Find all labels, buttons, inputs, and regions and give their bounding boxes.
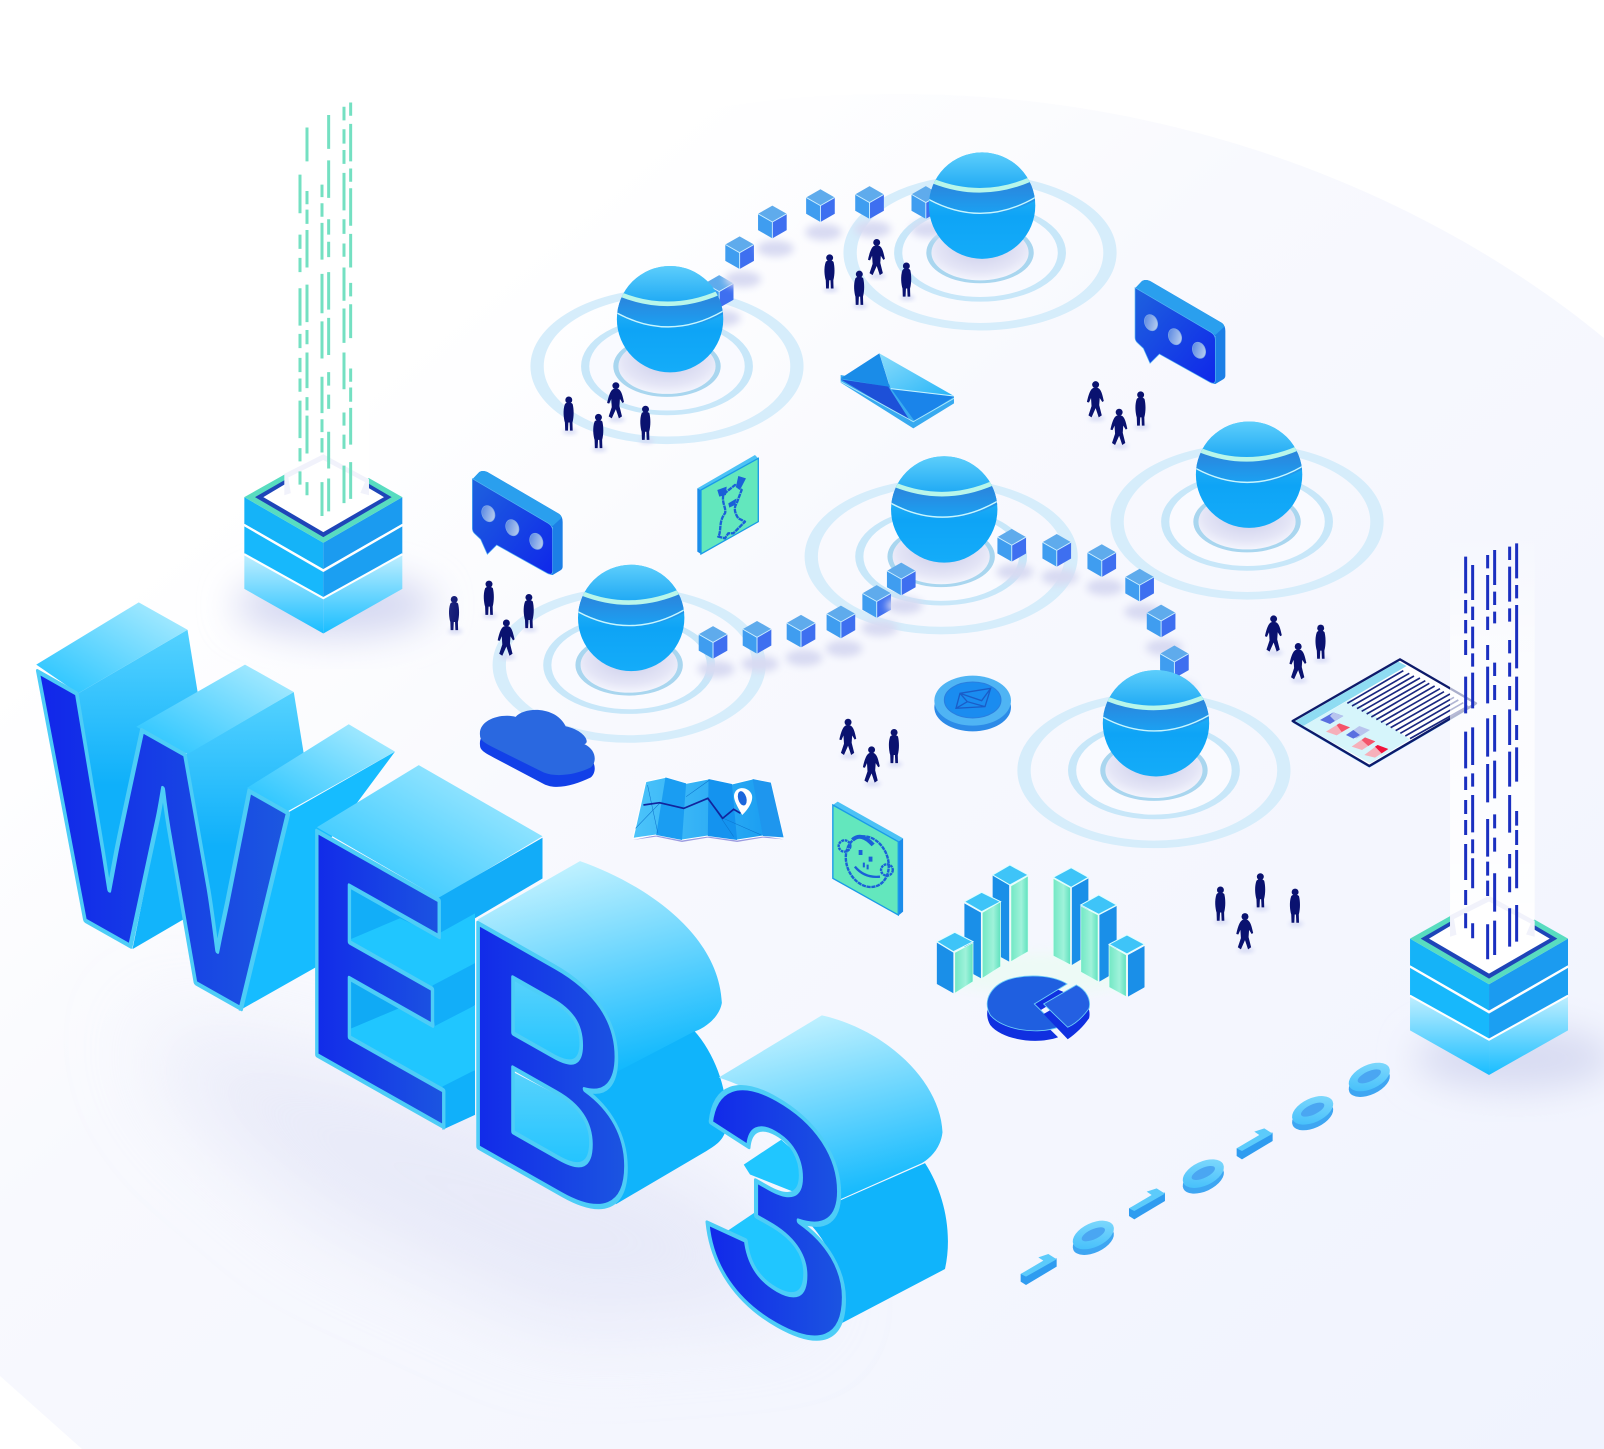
digit 1: [1021, 1254, 1057, 1285]
blockchain upper chain: [704, 186, 947, 326]
network ring: node 4: [1117, 448, 1377, 596]
envelope: [841, 353, 954, 428]
sphere node 5: [576, 557, 686, 671]
bar right 1: [1053, 868, 1088, 965]
network ring: node 2: [850, 179, 1110, 327]
cloud: [480, 710, 595, 787]
bar right 3: [1109, 935, 1145, 997]
left data tower: [235, 90, 435, 637]
sphere node 1: [615, 258, 725, 372]
bar right 2: [1081, 895, 1117, 982]
digit 0: [1178, 1153, 1228, 1199]
digit 1: [1237, 1128, 1273, 1159]
letters ground shadow: [140, 1020, 820, 1330]
right data tower: [1410, 532, 1604, 1090]
pie chart: [987, 976, 1090, 1041]
bar left 3: [993, 865, 1028, 962]
people group 6: [839, 719, 902, 786]
bar chart left and right with pie: [937, 865, 1145, 1041]
people group 1: [563, 382, 654, 452]
chat bubble left: [472, 471, 563, 575]
NFT card: monkey: [833, 802, 903, 916]
letter W: [36, 602, 395, 1106]
blockchain lower chain: [698, 529, 1196, 697]
sphere node 6: [1101, 662, 1211, 776]
letter B: B: [462, 845, 637, 1307]
network ring: node 6: [1024, 696, 1284, 844]
sphere node 2: [927, 144, 1037, 259]
people group 3: [1087, 381, 1149, 449]
tablet: [1293, 659, 1476, 768]
network ring: node 3: [811, 482, 1071, 631]
coin with ethereum mark: [934, 676, 1011, 731]
NFT card: dog: [697, 455, 758, 554]
numeral 3: [701, 991, 948, 1433]
people group 7: [1214, 873, 1303, 953]
network ring: node 5: [499, 591, 759, 739]
numeral 3: 3: [701, 991, 854, 1433]
people group 5: [1265, 615, 1329, 683]
letter E: [302, 753, 542, 1201]
bar left 1: [937, 932, 973, 993]
letter E: E: [302, 753, 453, 1201]
people group 2: [824, 239, 915, 308]
digit 0: [1288, 1090, 1338, 1136]
sphere node 4: [1194, 413, 1304, 528]
digit 0: [1344, 1057, 1394, 1103]
digit 0: [1068, 1215, 1118, 1261]
sphere node 3: [889, 448, 999, 563]
WEB3 3D lettering: [36, 602, 948, 1433]
chat bubble right: [1135, 280, 1225, 384]
bar left 2: [964, 892, 1001, 978]
people group 4: [448, 581, 537, 659]
map with pin: [633, 777, 784, 842]
network ring: node 1: [537, 292, 797, 440]
letter W: W: [38, 602, 291, 1106]
letter B: [462, 845, 727, 1307]
digit 1: [1129, 1188, 1165, 1219]
green data streams: [300, 102, 351, 516]
blue data streams: [1466, 543, 1517, 959]
binary row 1 0 1 0 1 0 0: [1021, 1057, 1394, 1285]
